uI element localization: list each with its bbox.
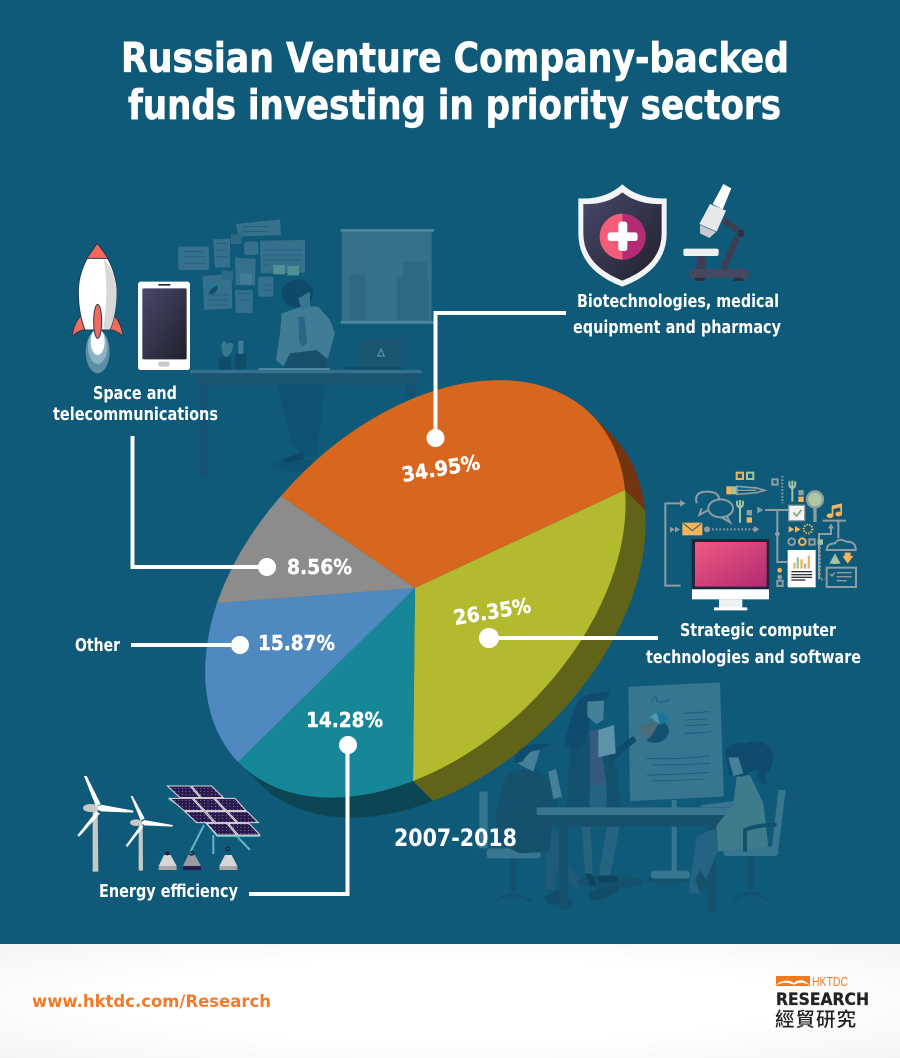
icon: solar panels bbox=[159, 786, 260, 870]
standing woman bbox=[582, 825, 593, 874]
percentage labels: 34.95% bbox=[400, 450, 482, 487]
icon: wind turbines bbox=[77, 776, 173, 872]
seated girl bbox=[688, 828, 718, 893]
leader line: other bbox=[131, 638, 247, 652]
slice: energy efficiency 14.28% bbox=[238, 588, 415, 798]
footer url: www.hktdc.com/Research bbox=[32, 992, 271, 1012]
title: funds investing in priority sectors bbox=[128, 81, 781, 129]
icon: tablet bbox=[138, 282, 190, 370]
head bbox=[282, 279, 313, 307]
chair right bbox=[772, 790, 786, 850]
label: strategic computer technologies: Strategic computer bbox=[680, 620, 836, 641]
table bbox=[545, 815, 735, 827]
leader line: strategic computer technologies bbox=[481, 630, 658, 646]
label: biotechnologies bbox=[573, 291, 781, 338]
label: period: 2007-2018 bbox=[394, 824, 517, 852]
leader line: energy efficiency bbox=[249, 738, 355, 894]
desk bbox=[190, 370, 422, 373]
laptop bbox=[361, 337, 402, 370]
label: space and telecommunications: Space and bbox=[93, 383, 177, 404]
illustration: office worker at desk bbox=[178, 219, 434, 477]
slice: space and telecommunications 8.56% bbox=[217, 496, 415, 603]
icon: microscope bbox=[683, 184, 749, 281]
icon: shield with medical cross bbox=[578, 184, 667, 287]
bases bbox=[159, 855, 177, 866]
flipchart bbox=[630, 684, 722, 799]
percentage labels: 14.28% bbox=[306, 708, 383, 732]
chair left bbox=[479, 792, 488, 848]
plants bbox=[218, 357, 231, 370]
title: Russian Venture Company-backed bbox=[121, 34, 789, 82]
footer band bbox=[0, 944, 900, 1058]
pie chart bbox=[205, 380, 646, 818]
percentage labels: 15.87% bbox=[258, 631, 335, 655]
report bbox=[788, 550, 816, 587]
logo research text: RESEARCH bbox=[776, 990, 869, 1009]
label: biotechnologies: Biotechnologies, medical bbox=[577, 291, 779, 312]
icon: rocket bbox=[72, 243, 123, 373]
illustration: meeting around a table bbox=[479, 684, 786, 913]
label: other: Other bbox=[75, 635, 120, 656]
logo chinese text: 經貿研究 bbox=[775, 1009, 856, 1031]
leader line: biotechnologies bbox=[428, 313, 566, 445]
shirt bbox=[276, 307, 335, 367]
pie side walls bbox=[238, 413, 646, 818]
title bbox=[121, 34, 789, 129]
seated man bbox=[545, 830, 583, 890]
slice: other 15.87% bbox=[205, 588, 415, 762]
slice: strategic computer technologies 26.35% bbox=[413, 490, 626, 781]
logo: HKTDC Research bbox=[774, 974, 869, 1031]
monitor bbox=[692, 539, 769, 589]
label: space and telecommunications: telecommunications bbox=[53, 404, 218, 425]
logo mark bbox=[774, 976, 811, 986]
legs bbox=[277, 385, 325, 457]
leader line: space and telecommunications bbox=[132, 436, 274, 574]
label: strategic computer technologies bbox=[646, 620, 861, 668]
label: space and telecommunications bbox=[53, 383, 218, 425]
logo wordmark: HKTDC bbox=[812, 974, 848, 989]
slice: biotechnologies 34.95% bbox=[281, 380, 625, 588]
icon: computer and technology symbols bbox=[665, 473, 856, 610]
label: biotechnologies: equipment and pharmacy bbox=[573, 317, 781, 338]
percentage labels: 26.35% bbox=[452, 593, 533, 630]
label: energy efficiency: Energy efficiency bbox=[99, 881, 238, 902]
percentage labels: 8.56% bbox=[287, 555, 352, 579]
percentage labels bbox=[258, 450, 533, 732]
